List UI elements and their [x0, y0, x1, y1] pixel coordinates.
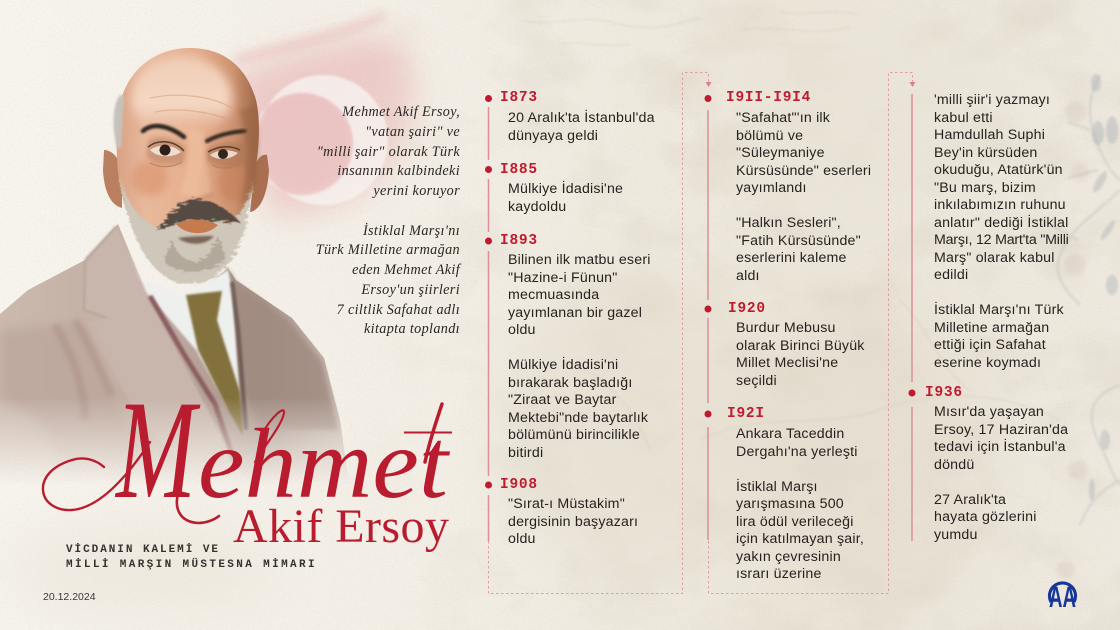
1936 text [934, 404, 1068, 542]
1893 text: "Hazine-i Fünun" [508, 270, 617, 286]
1873 text: dünyaya geldi [508, 128, 598, 144]
intro paragraph: eden Mehmet Akif [352, 262, 460, 278]
continued text: Hamdullah Suphi [934, 127, 1045, 143]
intro paragraph: Türk Milletine armağan [316, 242, 460, 258]
1893 year: I893 [500, 233, 538, 249]
timeline column 3 [925, 92, 1069, 542]
intro paragraph: yerini koruyor [373, 183, 460, 199]
1893 text: bitirdi [508, 444, 543, 460]
intro paragraph: İstiklal Marşı'nı [363, 222, 460, 238]
continued text: Milletine armağan [934, 320, 1049, 336]
1911-1914 text: "Fatih Kürsüsünde" [736, 232, 861, 248]
1893 text: yayımlanan bir gazel [508, 304, 642, 320]
1921 text: Ankara Taceddin [736, 426, 844, 442]
1893 text: Mülkiye İdadisi'ni [508, 357, 618, 373]
1873 text: 20 Aralık'ta İstanbul'da [508, 110, 655, 126]
1921 text: lira ödül verileceği [736, 514, 854, 530]
1911-1914 text: bölümü ve [736, 128, 803, 144]
continued text: inkılabımızın ruhunu [934, 197, 1066, 213]
continued text: eserine koymadı [934, 354, 1041, 370]
continued text: Marşı, 12 Mart'ta "Milli [934, 232, 1069, 248]
1893 text: oldu [508, 322, 536, 338]
intro paragraph: Ersoy'un şiirleri [361, 282, 460, 298]
1911-1914 text: eserlerini kaleme [736, 250, 847, 266]
continued text: okuduğu, Atatürk'ün [934, 162, 1063, 178]
1893 text: mecmuasında [508, 287, 599, 303]
1885 text: kaydoldu [508, 198, 566, 214]
1908 year: I908 [500, 477, 538, 493]
1936 text: Mısır'da yaşayan [934, 404, 1044, 420]
continued text: anlatır" dediği İstiklal [934, 214, 1068, 230]
1908 text: "Sırat-ı Müstakim" [508, 496, 625, 512]
1921 text: yakın çevresinin [736, 548, 841, 564]
1893 text: Bilinen ilk matbu eseri [508, 252, 651, 268]
1936 text: döndü [934, 456, 974, 472]
1893 text: "Ziraat ve Baytar [508, 392, 617, 408]
1921 text [736, 426, 864, 582]
continued text [934, 92, 1069, 370]
1911-1914 year: I9II-I9I4 [726, 90, 811, 106]
title: Mehmet Akif Ersoy: Akif Ersoy [233, 500, 449, 553]
1893 text: Mektebi"nde baytarlık [508, 410, 648, 426]
title: Mehmet Akif Ersoy [42, 380, 452, 553]
intro paragraph: insanının kalbindeki [337, 163, 460, 179]
1920 year: I920 [728, 301, 766, 317]
1936 text: 27 Aralık'ta [934, 492, 1006, 508]
1911-1914 text: Kürsüsünde" eserleri [736, 162, 871, 178]
flag [228, 15, 415, 220]
1936 text: tedavi için İstanbul'a [934, 439, 1066, 455]
1911-1914 text [736, 110, 871, 284]
title: Mehmet Akif Ersoy: ehmet [198, 408, 450, 519]
intro paragraph: Mehmet Akif Ersoy, [342, 104, 460, 120]
1873 year: I873 [500, 90, 538, 106]
intro paragraph: "vatan şairi" ve [365, 124, 460, 140]
continued text: kabul etti [934, 110, 993, 126]
date: 20.12.2024 [43, 591, 96, 603]
1936 text: hayata gözlerini [934, 509, 1037, 525]
1936 text: Ersoy, 17 Haziran'da [934, 422, 1068, 438]
1911-1914 text: "Süleymaniye [736, 145, 825, 161]
continued text: ettiği için Safahat [934, 337, 1046, 353]
intro paragraph: "milli şair" olarak Türk [317, 144, 460, 160]
continued text: "Bu marş, bizim [934, 180, 1036, 196]
1921 text: Dergahı'na yerleşti [736, 444, 858, 460]
1908 text: dergisinin başyazarı [508, 514, 638, 530]
1893 text: bölümünü birincilikle [508, 427, 640, 443]
continued text: İstiklal Marşı'nı Türk [934, 302, 1064, 318]
1873 text [508, 110, 655, 144]
continued text: Bey'in kürsüden [934, 144, 1038, 160]
continued text: edildi [934, 267, 968, 283]
decorative flowers right [1053, 75, 1120, 525]
1936 text: yumdu [934, 526, 978, 542]
intro paragraph: kitapta toplandı [364, 321, 460, 337]
intro paragraph [316, 104, 462, 337]
1920 text: Burdur Mebusu [736, 320, 836, 336]
timeline column 1 [500, 90, 655, 547]
1921 year: I92I [727, 406, 765, 422]
1885 year: I885 [500, 162, 538, 178]
1893 text: bırakarak başladığı [508, 374, 632, 390]
1911-1914 text: aldı [736, 268, 760, 284]
1936 year: I936 [925, 385, 963, 401]
1911-1914 text: "Safahat"'ın ilk [736, 110, 830, 126]
continued text: 'milli şiir'i yazmayı [934, 92, 1050, 108]
1920 text: olarak Birinci Büyük [736, 338, 865, 354]
subtitle [66, 543, 317, 571]
1893 text [508, 252, 651, 460]
1885 text: Mülkiye İdadisi'ne [508, 181, 623, 197]
1921 text: ısrarı üzerine [736, 566, 822, 582]
continued text: Marş" olarak kabul [934, 250, 1055, 266]
1920 text: Millet Meclisi'ne [736, 355, 838, 371]
subtitle: VİCDANIN KALEMİ VE [66, 544, 220, 556]
1908 text: oldu [508, 531, 536, 547]
portrait of Mehmet Akif Ersoy [0, 48, 350, 490]
1920 text [736, 320, 865, 388]
1920 text: seçildi [736, 372, 777, 388]
intro paragraph: 7 ciltlik Safahat adlı [337, 302, 460, 318]
1921 text: yarışmasına 500 [736, 496, 844, 512]
1921 text: için katılmayan şair, [736, 531, 864, 547]
timeline column 2 [726, 90, 871, 582]
subtitle: MİLLİ MARŞIN MÜSTESNA MİMARI [66, 559, 317, 571]
1911-1914 text: yayımlandı [736, 180, 807, 196]
1921 text: İstiklal Marşı [736, 478, 818, 494]
1908 text [508, 496, 638, 547]
1885 text [508, 180, 623, 214]
1911-1914 text: "Halkın Sesleri", [736, 215, 841, 231]
